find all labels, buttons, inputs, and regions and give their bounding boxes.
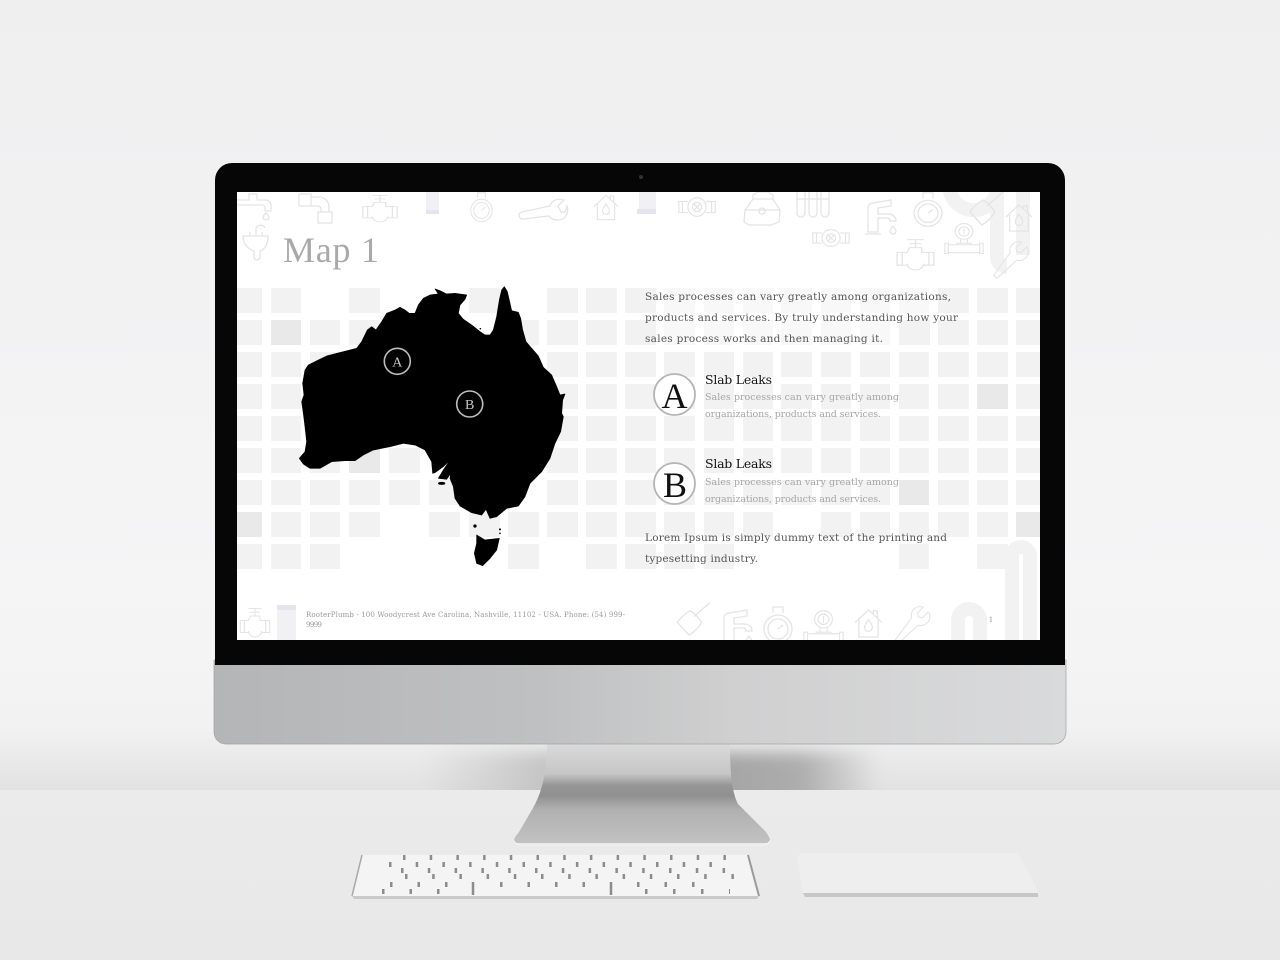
footer address: 9999 bbox=[306, 621, 322, 629]
intro paragraph: Sales processes can vary greatly among organizations, bbox=[645, 291, 951, 303]
map marker A: A bbox=[392, 356, 403, 370]
icon: pipe column bbox=[277, 605, 296, 640]
icon: faucet bbox=[865, 200, 896, 234]
map marker A bbox=[384, 348, 410, 374]
badge A bbox=[654, 374, 695, 416]
list item A bbox=[654, 372, 899, 420]
tile grid background bbox=[237, 288, 1040, 569]
description A bbox=[705, 392, 899, 420]
heading A: Slab Leaks bbox=[705, 372, 772, 387]
heading B: Slab Leaks bbox=[705, 456, 772, 471]
title: Map 1 bbox=[283, 230, 379, 270]
icon: stopwatch bbox=[914, 193, 942, 226]
icon: house with drop bbox=[594, 195, 618, 220]
keyboard bbox=[352, 855, 759, 899]
footer address bbox=[306, 611, 626, 629]
closing paragraph: typesetting industry. bbox=[645, 553, 758, 565]
icon: plunger bbox=[970, 192, 1003, 225]
icon: stopwatch bbox=[471, 193, 492, 222]
icon: filter tubes bbox=[797, 192, 829, 217]
badge B: B bbox=[663, 465, 687, 505]
intro paragraph bbox=[645, 291, 959, 345]
description B bbox=[705, 477, 899, 505]
slide screen bbox=[237, 185, 1040, 644]
badge A: A bbox=[662, 376, 688, 416]
page number: 1 bbox=[989, 616, 993, 624]
icon: gauge bbox=[804, 611, 843, 643]
icon: stopwatch bbox=[764, 607, 792, 643]
icon: wrench bbox=[895, 607, 930, 643]
badge B bbox=[654, 463, 695, 505]
decorative large pipes bbox=[950, 185, 1030, 640]
intro paragraph: sales process works and then managing it. bbox=[645, 333, 883, 345]
icon: valve bbox=[240, 608, 270, 637]
icon: plunger bbox=[677, 603, 710, 635]
icon: meter pipe bbox=[679, 198, 715, 216]
icon: house with drop bbox=[855, 610, 882, 637]
icon: valve bbox=[363, 195, 397, 222]
footer address: RooterPlumb - 100 Woodycrest Ave Carolina, Nashville, 11102 - USA. Phone: (54) 999- bbox=[306, 611, 626, 619]
footer icons bbox=[240, 603, 930, 644]
icon: elbow pipe bbox=[299, 194, 332, 223]
closing paragraph bbox=[645, 532, 947, 565]
map of Australia bbox=[299, 287, 565, 566]
icon: pipe column bbox=[637, 192, 656, 214]
icon: faucet bbox=[721, 610, 752, 644]
trackpad bbox=[797, 853, 1038, 897]
icon: pipe column bbox=[426, 192, 439, 214]
description B: organizations, products and services. bbox=[705, 494, 881, 505]
icon: sink bbox=[243, 225, 268, 260]
icon: toolbox bbox=[744, 192, 780, 225]
monitor bezel bbox=[215, 163, 1065, 665]
icon: valve bbox=[897, 240, 934, 270]
monitor stand bbox=[513, 744, 771, 846]
icon: house with drop bbox=[1006, 205, 1032, 231]
icon row: top bbox=[237, 192, 1032, 278]
closing paragraph: Lorem Ipsum is simply dummy text of the printing and bbox=[645, 532, 947, 544]
icon: meter pipe bbox=[813, 230, 849, 246]
list item B bbox=[654, 456, 899, 505]
intro paragraph: products and services. By truly understanding how your bbox=[645, 312, 959, 324]
icon: gauge bbox=[945, 224, 983, 253]
description A: organizations, products and services. bbox=[705, 409, 881, 420]
map marker B bbox=[457, 391, 483, 417]
description A: Sales processes can vary greatly among bbox=[705, 392, 899, 403]
background: wall and desk bbox=[0, 744, 1280, 960]
icon: tap bbox=[237, 194, 271, 220]
map marker B: B bbox=[465, 398, 474, 413]
icon: wrench bbox=[994, 242, 1028, 278]
icon: wrench bbox=[519, 199, 568, 220]
description B: Sales processes can vary greatly among bbox=[705, 477, 899, 488]
monitor chin bbox=[214, 660, 1066, 744]
